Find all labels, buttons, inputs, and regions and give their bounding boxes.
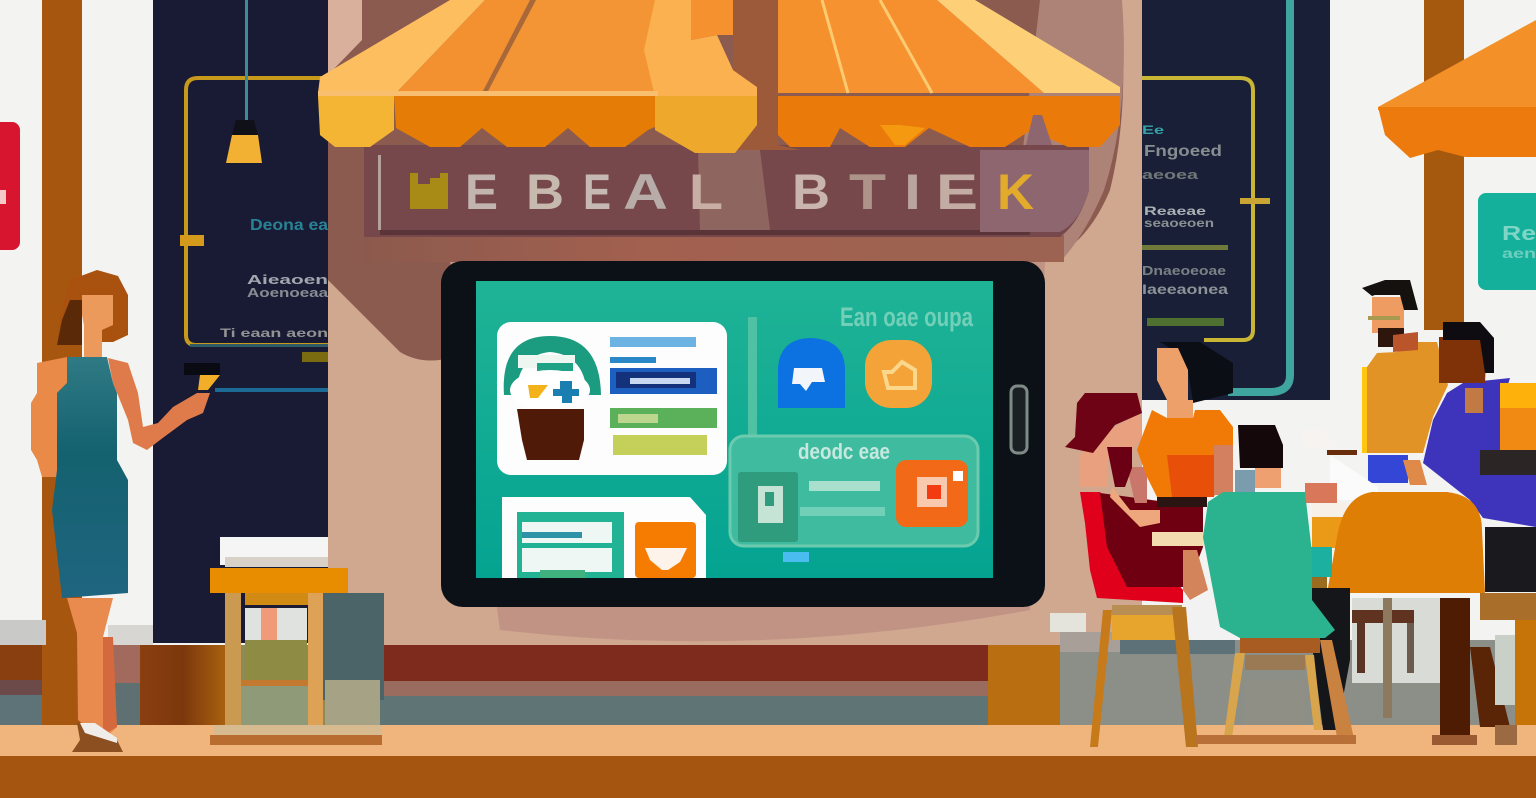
divider line xyxy=(748,317,757,447)
chair: red chair legs xyxy=(1090,605,1198,747)
chair back xyxy=(1080,492,1183,603)
panel: info card: deodc eae xyxy=(798,439,890,464)
panel: shop sign: E xyxy=(936,164,978,220)
legs xyxy=(67,598,117,740)
panel: right chalkboard: Reaeae xyxy=(1144,204,1206,218)
panel: left chalkboard: Ti eaan aeon xyxy=(220,326,328,340)
icon: hanging lamp xyxy=(226,0,262,163)
panel: info card xyxy=(730,436,978,546)
side button xyxy=(1011,386,1027,453)
figure: man in blue xyxy=(1423,322,1536,592)
panel: shop sign: B xyxy=(792,164,830,220)
screen heading: Ean oae oupa xyxy=(840,302,974,332)
panel: shop sign: A xyxy=(623,164,668,220)
teal wall sign xyxy=(1478,193,1536,290)
panel: shop sign: B xyxy=(526,164,564,220)
panel: left chalkboard xyxy=(153,0,329,643)
teal wall sign: aen xyxy=(1502,245,1536,261)
icon: blue chat bubble xyxy=(778,338,845,408)
top right awning xyxy=(1378,20,1536,158)
table and chairs legs right xyxy=(1352,593,1536,745)
dress xyxy=(52,357,128,598)
figure: standing woman xyxy=(31,270,220,752)
panel: right chalkboard: Iaeeaonea xyxy=(1142,281,1228,297)
panel: right chalkboard: Dnaeoeoae xyxy=(1142,263,1226,278)
panel: left chalkboard: Aoenoeaa xyxy=(247,285,329,300)
blue dash xyxy=(783,552,809,562)
figure: woman in orange xyxy=(1137,342,1233,507)
hair xyxy=(57,270,128,345)
panel: left chalkboard: Deona ea xyxy=(250,217,328,234)
chair: teal man chair xyxy=(1196,638,1356,744)
panel: phone menu xyxy=(441,261,1045,607)
icon: red wall sign xyxy=(0,122,20,250)
panel: central building wall xyxy=(328,0,1142,645)
figure: standing man in yellow xyxy=(1362,280,1448,485)
panel: shop sign xyxy=(364,145,1089,237)
floor xyxy=(0,725,1536,798)
left arm xyxy=(31,357,67,477)
panel: right chalkboard: Fngoeed xyxy=(1144,143,1222,160)
panel: shop sign: E xyxy=(465,164,498,220)
menu card: cupcake xyxy=(497,322,727,475)
phone body xyxy=(441,261,1045,607)
book xyxy=(1152,532,1204,546)
panel: shop sign: L xyxy=(689,164,723,220)
icon: orange badge xyxy=(865,340,932,408)
panel: left chalkboard: Aieaoen xyxy=(247,272,328,287)
panel: right chalkboard: Ee xyxy=(1142,123,1164,137)
hair xyxy=(1065,393,1142,453)
panel: right chalkboard: aeoea xyxy=(1142,167,1199,182)
panel: right chalkboard xyxy=(1142,0,1330,400)
panel: shop sign: K xyxy=(997,164,1034,220)
main awning xyxy=(318,0,1120,153)
phone screen xyxy=(476,281,993,578)
teal wall sign: Re xyxy=(1502,223,1536,245)
menu card: bottom xyxy=(502,497,706,578)
figure: seated man in teal xyxy=(1203,425,1357,730)
panel: base counter xyxy=(0,600,1536,725)
icon: ice cream cone xyxy=(184,363,220,390)
panel: shop sign: I xyxy=(904,164,921,220)
stool xyxy=(210,537,384,745)
torso xyxy=(1100,493,1203,587)
panel: right chalkboard: seaoeoen xyxy=(1144,216,1214,230)
panel: shop sign: T xyxy=(849,164,886,220)
orange dome chair xyxy=(1312,455,1485,593)
panel: shop sign: E xyxy=(583,164,611,220)
head xyxy=(82,295,113,357)
right arm xyxy=(108,358,210,450)
figure: woman in red chair xyxy=(1065,393,1208,603)
skin xyxy=(1080,413,1142,487)
shoe xyxy=(72,723,123,752)
